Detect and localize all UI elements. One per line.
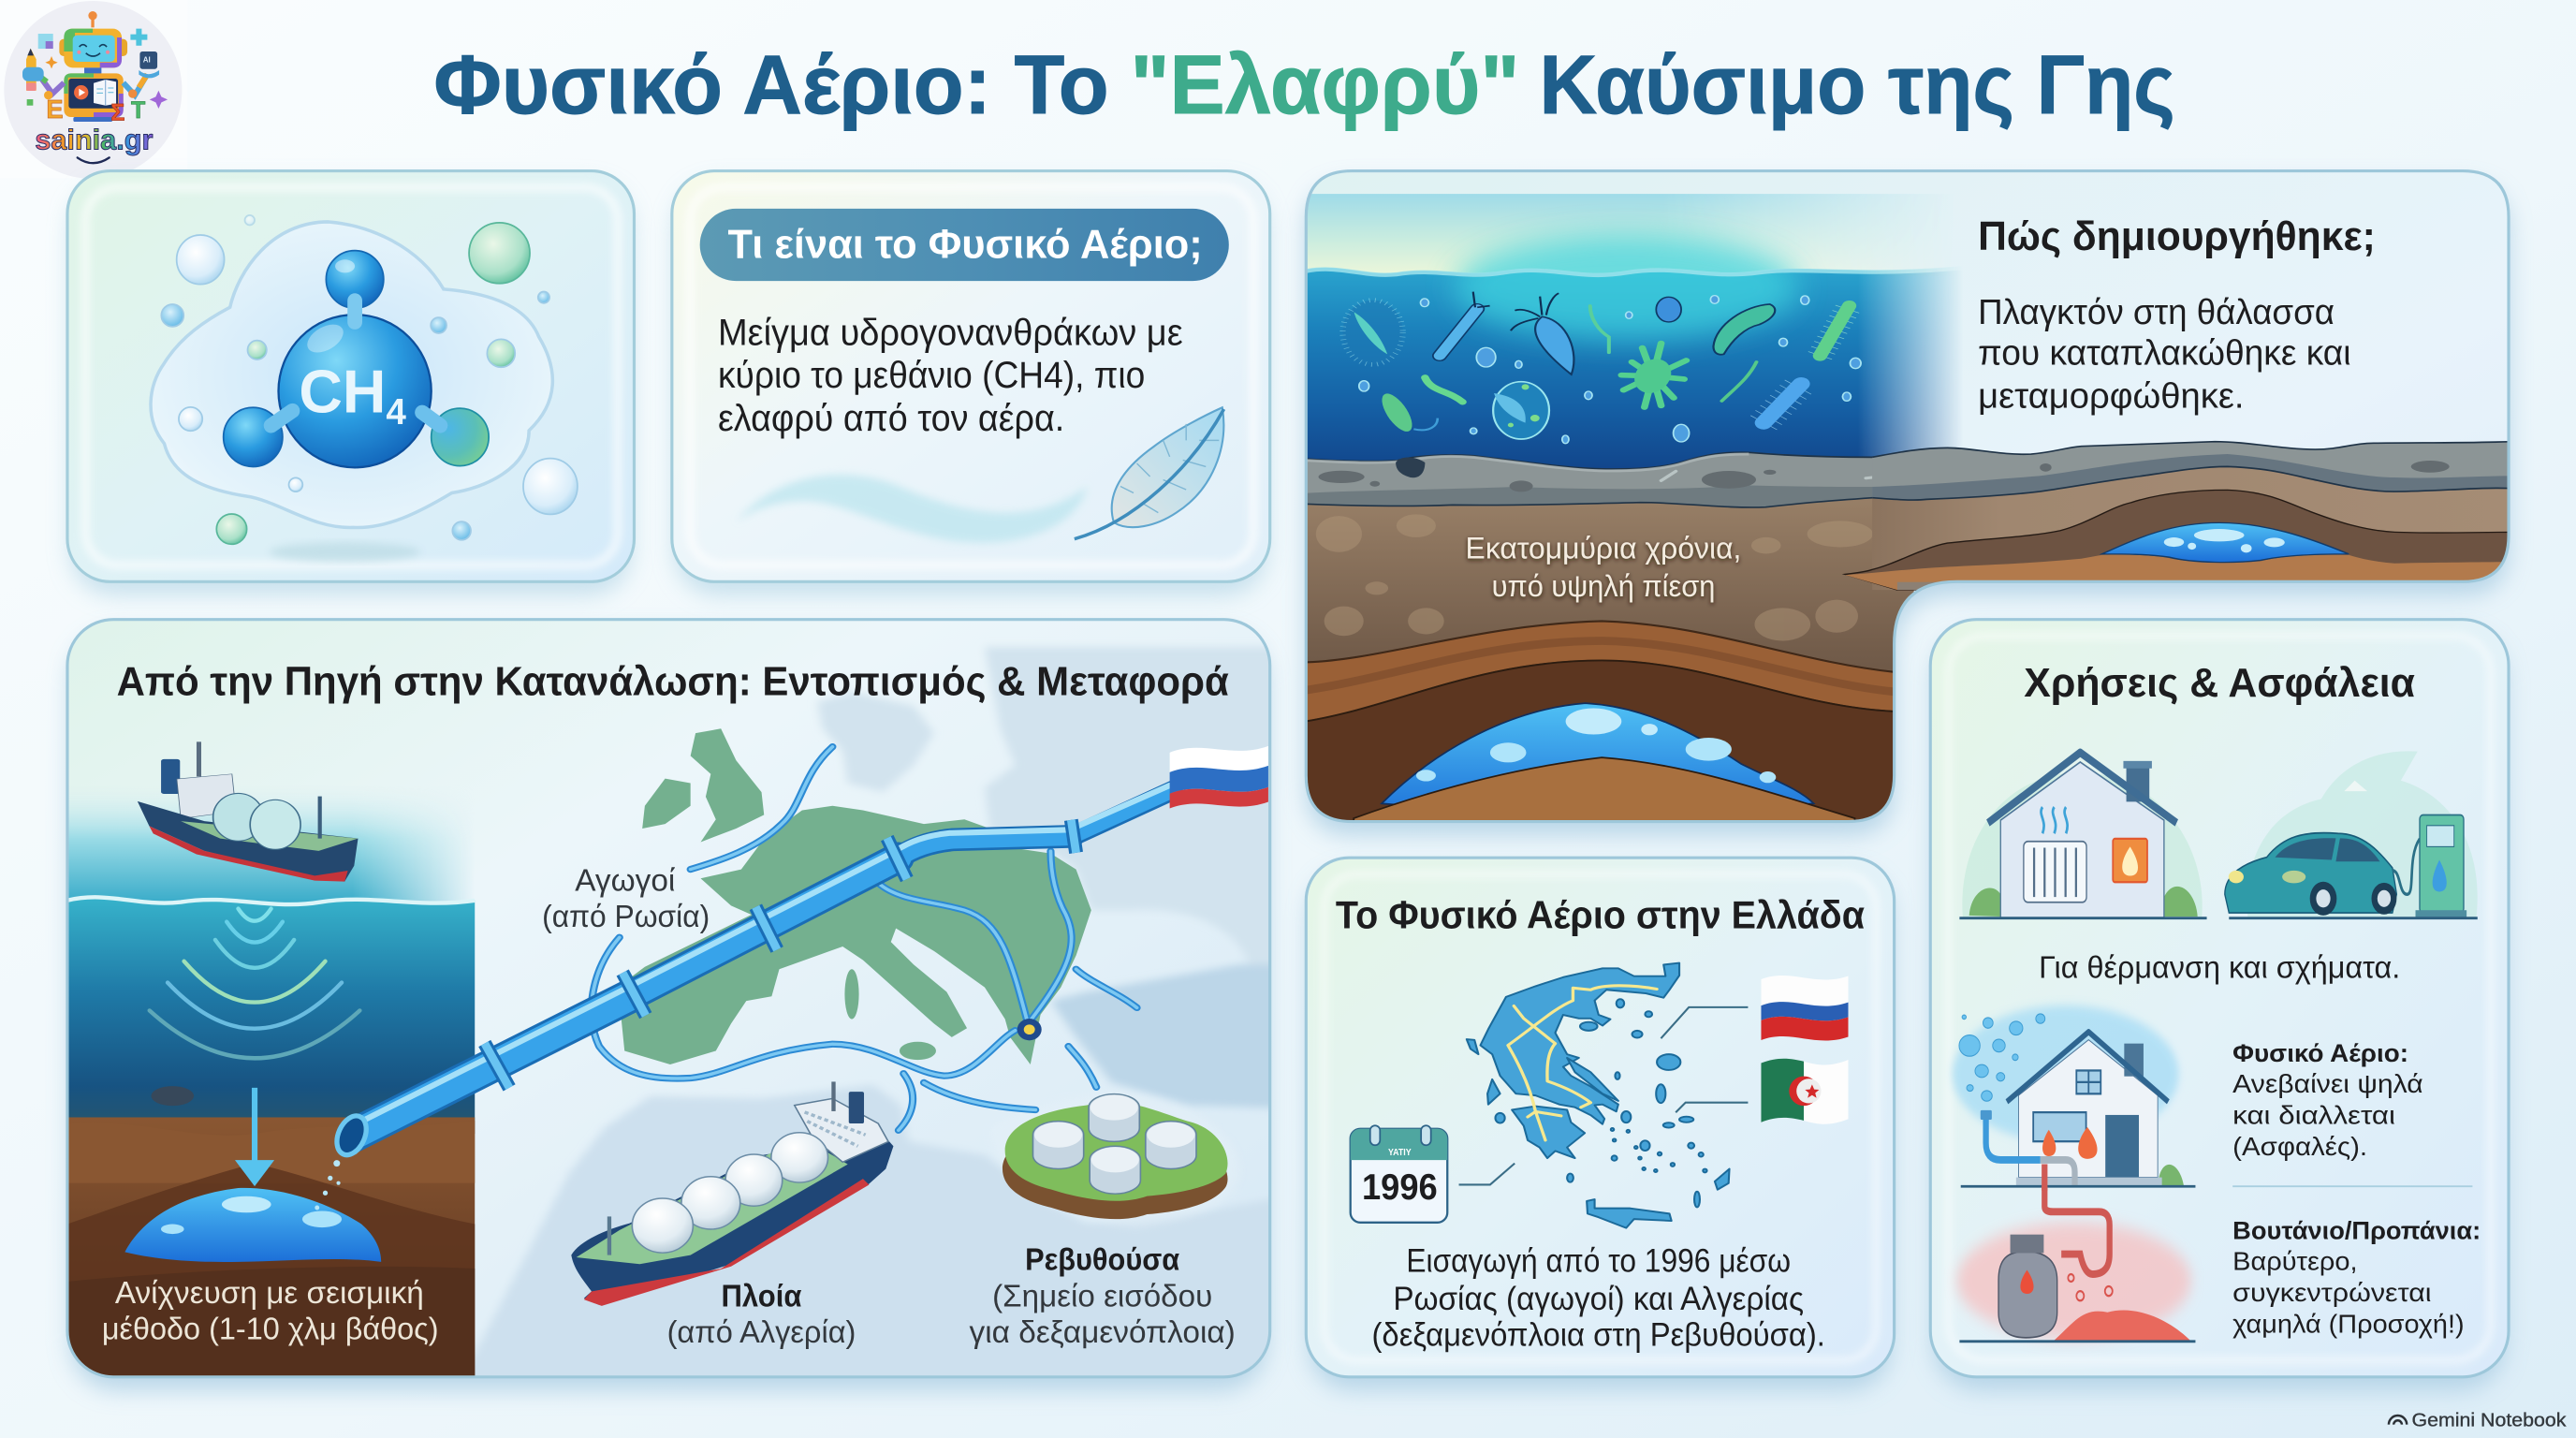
heading pill [700, 209, 1229, 281]
icon: small gas pocket [2102, 522, 2349, 563]
icon: Russian flag [1761, 976, 1848, 1040]
text block: natural gas safety [2232, 1038, 2423, 1161]
icon: Russian flag on pipeline [1170, 746, 1268, 809]
logo: sainia.gr: Σ [110, 99, 124, 125]
text block: butane propane safety [2232, 1215, 2481, 1338]
icon: feather [1075, 407, 1224, 539]
text block: butane propane safety: συγκεντρώνεται [2232, 1278, 2432, 1307]
text block: Greek imports: Εισαγωγή από το 1996 μέσω [1406, 1242, 1791, 1279]
label: ships: (από Αλγερία) [667, 1315, 856, 1350]
text block: Greek imports: (δεξαμενόπλοια στη Ρεβυθούσα). [1372, 1316, 1825, 1353]
title: Καύσιμο της Γης [1540, 37, 2175, 131]
strata left [1306, 621, 1895, 721]
heading pill: Τι είναι το Φυσικό Αέριο; [728, 222, 1203, 268]
icon: survey ship [138, 741, 359, 882]
map of Europe [476, 645, 1268, 1376]
panel: natural gas in Greece [1306, 858, 1895, 1390]
title [433, 37, 2175, 131]
logo: sainia.gr [0, 0, 187, 179]
heading: Greece: Το Φυσικό Αέριο στην Ελλάδα [1336, 893, 1865, 937]
heading: source to consumption: Από την Πηγή στην Κατανάλωση: Εντοπισμός & Μεταφορά [117, 658, 1229, 704]
caption: uses: Για θέρμανση και σχήματα. [2039, 950, 2400, 985]
title: "Ελαφρύ" [1131, 37, 1519, 131]
title: Φυσικό Αέριο: Το [433, 37, 1109, 131]
label: Revithoussa: (Σημείο εισόδου [992, 1279, 1212, 1313]
text block: definition: κύριο το μεθάνιο (CH4), πιο [718, 355, 1145, 396]
text block: butane propane safety: Βουτάνιο/Προπάνια: [2232, 1215, 2481, 1244]
label: Revithoussa: για δεξαμενόπλοια) [970, 1315, 1236, 1350]
text block: seismic detection [102, 1276, 439, 1346]
text block: seismic detection: μέθοδο (1-10 χλμ βάθος) [102, 1312, 439, 1346]
sea scene [1306, 194, 1963, 485]
logo: sainia.gr: AI [143, 56, 151, 65]
logo: sainia.gr: sainia.gr [35, 124, 153, 155]
thin gas pipelines [592, 747, 1137, 1130]
text block: millions of years [1466, 532, 1741, 603]
icon: heated house [1959, 753, 2207, 918]
icon: CH4 molecule: 4 [386, 392, 406, 433]
text block: Greek imports [1372, 1242, 1825, 1353]
text block: natural gas safety: (Ασφαλές). [2232, 1132, 2367, 1161]
label: Revithoussa: Ρεβυθούσα [1025, 1243, 1180, 1278]
icon: air wisp [736, 475, 1088, 543]
gray rock left [1306, 452, 1873, 507]
icon: gas leak spray [315, 1160, 341, 1210]
text block: millions of years: Εκατομμύρια χρόνια, [1466, 532, 1741, 565]
icon: gas reservoir [124, 1188, 381, 1262]
icon: arrow down to reservoir [235, 1088, 274, 1186]
Greek pipeline network [1508, 986, 1657, 1140]
logo: sainia.gr: Ε [46, 95, 64, 124]
icon: sonar waves [150, 909, 359, 1058]
watermark: Gemini Notebook: Gemini Notebook [2411, 1410, 2567, 1431]
panel: methane molecule [67, 171, 634, 594]
label: pipelines: (από Ρωσία) [542, 900, 710, 934]
panel: from source to consumption [67, 620, 1339, 1438]
icon: pipeline hub [1017, 1019, 1042, 1040]
icon: CH4 molecule: CH [299, 358, 386, 426]
map of Greece with pipelines [1467, 963, 1730, 1228]
text block: millions of years: υπό υψηλή πίεση [1492, 569, 1715, 603]
icon: calendar 1996 [1351, 1125, 1447, 1223]
heading: how it formed: Πώς δημιουργήθηκε; [1978, 213, 2376, 259]
icon: heavy gas cylinder [1956, 1164, 2195, 1342]
stones [1316, 514, 1873, 640]
text block: seismic detection: Ανίχνευση με σεισμική [115, 1276, 424, 1311]
logo: sainia.gr: Τ [131, 97, 145, 124]
icon: calendar 1996: ΥΑΤΙΥ [1388, 1147, 1412, 1158]
icon: gas cloud [151, 222, 552, 528]
icon: LNG tanker [571, 1081, 893, 1306]
rock strata [1306, 442, 2511, 829]
icon: CH4 molecule [224, 251, 489, 562]
icon: floating bubbles [161, 215, 578, 544]
panel: what is natural gas [672, 171, 1270, 594]
icon: calendar 1996: 1996 [1362, 1167, 1438, 1208]
panel: how it formed [1306, 171, 2511, 835]
icon: large gas pocket [1380, 702, 1816, 805]
panel: uses and safety [1930, 620, 2509, 1390]
icon: main pipeline [331, 785, 1173, 1160]
text block: plankton description [1978, 292, 2351, 415]
text block: definition [718, 313, 1183, 439]
text block: butane propane safety: χαμηλά (Προσοχή!) [2232, 1309, 2465, 1338]
label: pipelines [542, 863, 710, 934]
heading: uses and safety: Χρήσεις & Ασφάλεια [2024, 660, 2415, 706]
label: ships: Πλοία [721, 1279, 802, 1313]
text block: Greek imports: Ρωσίας (αγωγοί) και Αλγερίας [1393, 1281, 1804, 1317]
text block: natural gas safety: Ανεβαίνει ψηλά [2232, 1069, 2423, 1098]
icon: methane rising house [1953, 1005, 2195, 1186]
text block: definition: ελαφρύ από τον αέρα. [718, 398, 1064, 439]
icon: Algerian flag [1761, 1059, 1848, 1124]
text block: definition: Μείγμα υδρογονανθράκων με [718, 313, 1183, 354]
label: pipelines: Αγωγοί [575, 863, 676, 898]
strata right [1845, 442, 2511, 590]
icon: gas car and pump [2225, 751, 2478, 918]
icons: plankton [1342, 292, 1861, 444]
text block: natural gas safety: Φυσικό Αέριο: [2232, 1038, 2408, 1067]
connector lines [1459, 1007, 1748, 1184]
icon: Revithoussa island terminal [1003, 1094, 1228, 1219]
text block: butane propane safety: Βαρύτερο, [2232, 1247, 2358, 1276]
text block: plankton description: που καταπλακώθηκε και [1978, 333, 2351, 373]
text block: plankton description: μεταμορφώθηκε. [1978, 375, 2244, 415]
label: ships [667, 1279, 856, 1350]
text block: plankton description: Πλαγκτόν στη θάλασσα [1978, 292, 2334, 331]
label: Revithoussa [970, 1243, 1236, 1350]
text block: natural gas safety: και διαλλεται [2232, 1100, 2395, 1129]
left column: sea and seabed [67, 785, 475, 1380]
